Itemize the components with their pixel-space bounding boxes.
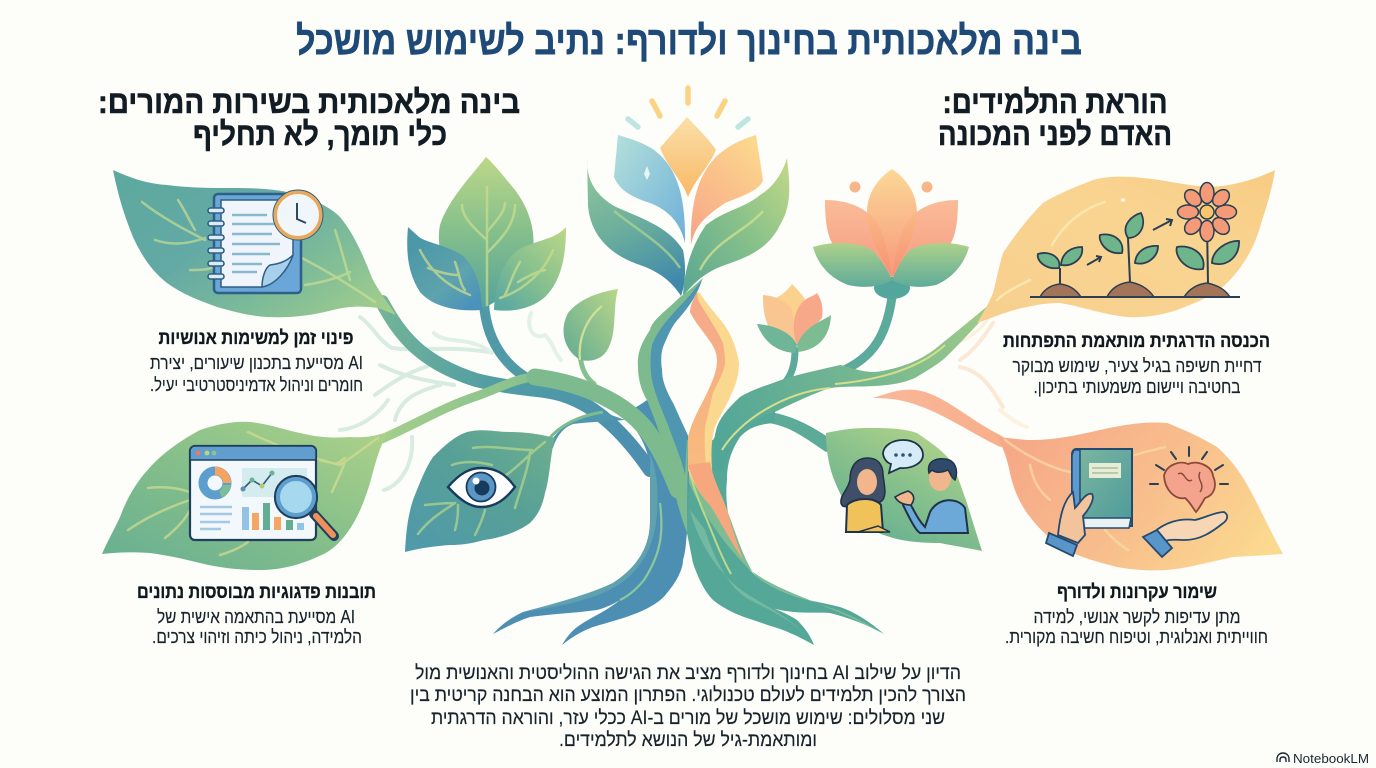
left root strips (523, 452, 658, 612)
panel: gradual introduction (977, 170, 1275, 397)
heading: students column: הוראת התלמידים: (942, 84, 1168, 120)
summary paragraph: ומותאמת-גיל של הנושא לתלמידים. (559, 729, 817, 751)
heading: teachers column: כלי תומך, לא תחליף (193, 116, 447, 152)
branch: flower stem (830, 297, 892, 376)
faint root wisps (340, 313, 1027, 490)
panel: eye leaf (405, 430, 555, 552)
petal: orange (691, 135, 763, 245)
heading: הכנסה הדרגתית מותאמת התפתחות (1003, 331, 1270, 352)
petal: center (660, 117, 716, 197)
tree: branches (382, 297, 892, 470)
right root strips (686, 470, 880, 632)
dots (850, 182, 860, 192)
body text (1005, 606, 1268, 647)
trunk right mass (687, 405, 884, 645)
body text: AI מסייעת בתכנון שיעורים, יצירת (150, 352, 363, 373)
veins (1005, 440, 1165, 550)
heading: שימור עקרונות ולדורף (1057, 582, 1217, 603)
body text: בחטיבה ויישום משמעותי בתיכון. (1034, 376, 1240, 397)
leaf: eye (405, 430, 555, 552)
panel: preserving Waldorf principles (997, 422, 1283, 647)
veins (418, 442, 545, 535)
body text: AI מסייעת בהתאמה אישית של (157, 606, 355, 627)
body text (150, 352, 363, 395)
summary paragraph: הדיון על שילוב AI בחינוך ולדורף מציב את הגישה ההוליסטית והאנושית מול (415, 662, 961, 684)
trunk left mass (493, 400, 690, 645)
tree: trunk and roots (372, 278, 1002, 645)
right flower (813, 169, 969, 299)
petal: blue (614, 135, 685, 243)
right yellow leaf stem (713, 294, 1002, 470)
veins (142, 200, 375, 302)
leaf: conversation (826, 428, 982, 551)
strand: orange side (688, 292, 725, 470)
body text: הלמידה, ניהול כיתה וזיהוי צרכים. (152, 626, 362, 647)
summary paragraph: הצורך להכין תלמידים לעולם טכנולוגי. הפתרון המוצע הוא הבחנה קריטית בין (410, 684, 966, 706)
branch: notebook leaf stem (382, 302, 650, 470)
leaf: right (494, 227, 566, 311)
veins (420, 187, 553, 305)
calyx (874, 277, 910, 299)
leaf: right (683, 158, 789, 296)
branch: small leaf stem (580, 350, 594, 384)
strand: orange, yellow side (688, 292, 739, 515)
strand: orange tail (688, 462, 743, 560)
green branch from data leaf, thin part (372, 376, 540, 443)
body text: חומרים וניהול אדמיניסטרטיבי יעיל. (150, 374, 363, 395)
title: בינה מלאכותית בחינוך ולדורף: נתיב לשימוש מושכל (296, 19, 1082, 63)
heading: teachers column (98, 84, 520, 152)
body text: מתן עדיפות לקשר אנושי, למידה (1034, 606, 1240, 627)
petals (825, 200, 892, 277)
leaf: orange (997, 422, 1283, 570)
heading: teachers column: בינה מלאכותית בשירות המורים: (98, 84, 520, 120)
summary paragraph: שני מסלולים: שימוש מושכל של מורים ב-AI ככלי עזר, והוראה הדרגתית (431, 707, 945, 729)
small side leaf (564, 289, 618, 361)
heading: students column (938, 84, 1172, 152)
branch: trefoil stem (484, 304, 550, 388)
strand: blue (650, 280, 702, 475)
trefoil leaves (407, 157, 566, 311)
small bud (757, 284, 831, 353)
leaf: center (439, 157, 534, 308)
branch: bud stem (782, 350, 795, 386)
leaf: left (587, 158, 685, 296)
panel: conversation leaf (826, 428, 982, 551)
icon: growing plants (1030, 182, 1240, 297)
eye leaf stem (548, 412, 625, 448)
body text: דחיית חשיפה בגיל צעיר, שימוש מבוקר (1012, 355, 1262, 376)
heading: תובנות פדגוגיות מבוססות נתונים (137, 582, 376, 603)
icon: brain in hand (1143, 447, 1228, 557)
branch: conversation leaf stem (768, 412, 840, 452)
icon: two people talking (841, 440, 968, 533)
body text (1012, 355, 1262, 397)
body text: חווייתית ואנלוגית, וטיפוח חשיבה מקורית. (1005, 626, 1268, 647)
icon: eye (448, 468, 515, 507)
body text (152, 606, 362, 647)
summary paragraph (410, 662, 966, 751)
leaf: data (102, 422, 388, 570)
strand: green (638, 278, 703, 533)
leaf: left (407, 227, 482, 310)
NotebookLM logo: NotebookLM (1293, 752, 1369, 766)
panel: data-driven insights (102, 422, 388, 647)
top tulip (587, 88, 789, 296)
icon: notebook with clock (208, 190, 323, 293)
rays (628, 88, 748, 127)
panel: time for human tasks (113, 170, 396, 395)
heading: פינוי זמן למשימות אנושיות (158, 328, 354, 349)
green branch, thick part (535, 377, 678, 490)
leaf: notebook (113, 170, 396, 317)
leaf: yellow (977, 170, 1275, 323)
heading: students column: האדם לפני המכונה (938, 116, 1172, 152)
icon: book in hand (1046, 449, 1132, 556)
leaves (813, 243, 892, 287)
icon: dashboard with magnifier (190, 446, 334, 540)
small orange leaf stem (872, 390, 1015, 447)
veins (128, 432, 378, 555)
